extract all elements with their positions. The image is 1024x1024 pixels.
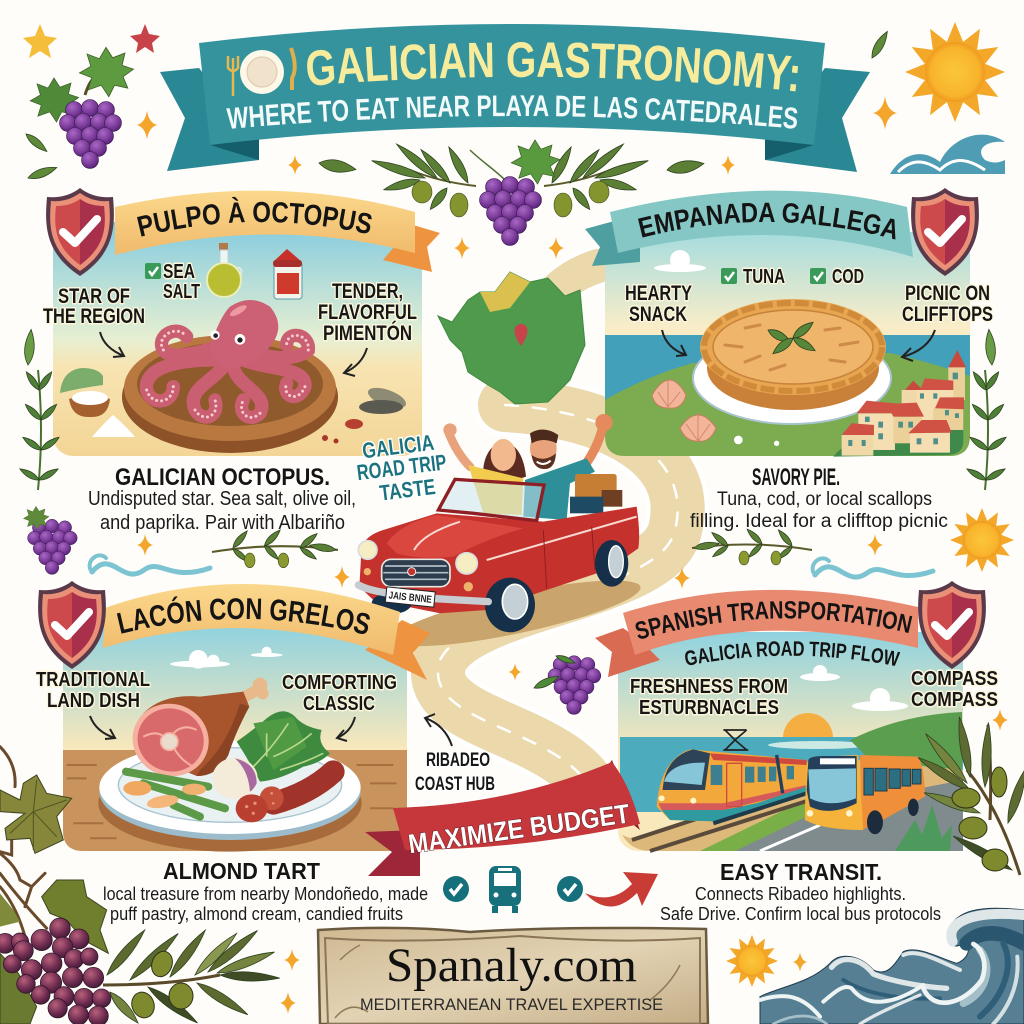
decor: grapes near road <box>509 653 601 714</box>
icon: train <box>657 730 807 823</box>
label: galicia road trip taste: TASTE <box>378 474 437 506</box>
heading: road trip flow: GALICIA ROAD TRIP FLOW <box>685 641 900 666</box>
ribbon: pulpo <box>115 191 440 272</box>
label: comforting classic: CLASSIC <box>303 693 375 715</box>
plate <box>98 741 362 852</box>
label: ribadeo coast hub: COAST HUB <box>415 774 495 795</box>
icon: paprika jar <box>273 249 302 299</box>
text block: easy transit: Connects Ribadeo highlights. <box>695 884 906 904</box>
label: freshness: ESTURBNACLES <box>639 697 779 719</box>
text block: almond tart: puff pastry, almond cream, candied fruits <box>110 904 403 924</box>
label: hearty snack: SNACK <box>629 303 687 326</box>
headlights <box>358 541 377 559</box>
brand name: Spanaly.com <box>386 939 637 992</box>
ribbon title: lacon: LACÓN CON GRELOS <box>116 596 370 634</box>
shield badge: empanada <box>911 188 979 276</box>
panel scene: cloud <box>654 250 706 272</box>
decor: side laurels <box>18 329 1008 490</box>
arrow: star label to plate <box>100 332 124 357</box>
wheels <box>372 593 412 614</box>
ribbon: lacon <box>103 584 430 680</box>
panel scene: rails and road <box>622 760 963 851</box>
subtitle text: WHERE TO EAT NEAR PLAYA DE LAS CATEDRALES <box>226 95 798 129</box>
label: compass: COMPASS <box>911 689 998 711</box>
arrow: to ribadeo hub <box>425 714 452 746</box>
ribbon title: maximize budget: MAXIMIZE BUDGET <box>406 798 632 859</box>
text block: almond tart <box>103 858 428 924</box>
illustration: red convertible with couple <box>358 414 645 659</box>
icon: plate with fork and knife <box>228 48 295 96</box>
label: hearty snack: HEARTY <box>625 282 692 305</box>
decor: right sprig, swirl and sun <box>674 508 1014 589</box>
luggage <box>570 474 622 513</box>
text block: galician octopus: Undisputed star. Sea salt, olive oil, <box>88 488 356 510</box>
car body <box>359 507 639 613</box>
ribbon title: empanada: EMPANADA GALLEGA <box>638 202 896 240</box>
text block: galician octopus <box>88 464 356 534</box>
turnip <box>212 758 258 799</box>
label: picnic on clifftops: CLIFFTOPS <box>902 303 993 326</box>
decor: bottom left vine and grapes <box>0 747 111 1024</box>
plaque: spanaly.com <box>318 928 708 1024</box>
text block: almond tart: ALMOND TART <box>163 858 320 884</box>
shield badge: pulpo <box>46 188 114 276</box>
ribbon title: transportation: SPANISH TRANSPORTATION <box>636 601 912 639</box>
licence plate: JAIS BNNE <box>388 590 432 606</box>
text block: easy transit: EASY TRANSIT. <box>720 859 882 885</box>
tagline: MEDITERRANEAN TRAVEL EXPERTISE <box>360 995 663 1014</box>
label: traditional land dish: LAND DISH <box>47 690 140 712</box>
label: star of the region: STAR OF <box>58 285 130 308</box>
icon: sea salt check <box>145 263 161 279</box>
icon: wooden plate <box>122 335 338 453</box>
chorizo <box>236 772 333 822</box>
panel scene: wooden table <box>63 750 407 851</box>
label: tender flavorful pimenton: FLAVORFUL <box>318 301 417 324</box>
icon: cod check <box>810 268 826 284</box>
arrow: pimenton label to plate <box>344 348 367 376</box>
clouds <box>170 647 283 669</box>
text block: savory pie: filling. Ideal for a clifftop picnic <box>690 511 948 532</box>
lacon dish illustration <box>67 647 397 852</box>
label: star of the region: THE REGION <box>43 305 145 328</box>
text block: galician octopus: and paprika. Pair with Albariño <box>100 512 345 534</box>
text block: savory pie <box>690 464 948 532</box>
label: sea: SEA <box>163 261 195 283</box>
panel scene: green hill <box>605 353 970 456</box>
asparagus with almonds <box>123 772 225 817</box>
ribbon: empanada <box>585 191 913 266</box>
shield badge: lacon <box>38 581 106 669</box>
label: freshness: FRESHNESS FROM <box>630 676 788 698</box>
icon: tuna check <box>721 268 737 284</box>
grille <box>382 559 450 587</box>
ribbon: maximize budget <box>365 760 640 876</box>
decor: right olive branch <box>916 709 1024 875</box>
windshield <box>438 479 544 521</box>
panel scene: bushes <box>60 368 103 393</box>
licence plate <box>385 587 435 607</box>
icon: scallop shells <box>652 380 716 441</box>
icon: galicia map with pin <box>438 272 585 404</box>
label: cod: COD <box>832 266 864 288</box>
text block: easy transit: Safe Drive. Confirm local bus protocols <box>660 904 941 924</box>
decor: bottom olive branch <box>103 927 300 1024</box>
panel scene: clouds <box>800 665 908 711</box>
text block: easy transit <box>660 859 941 924</box>
decor: left grapes and swirl <box>23 506 350 588</box>
panel scene: agave plant <box>895 805 952 851</box>
decor: bottom sun <box>726 935 807 987</box>
icon: olive oil bottle <box>207 243 241 297</box>
panel scene: sun and sea <box>620 713 963 812</box>
icon: clam shells <box>322 384 409 444</box>
label: tender flavorful pimenton: TENDER, <box>332 280 403 303</box>
title text: GALICIAN GASTRONOMY: <box>307 42 798 92</box>
text block: galician octopus: GALICIAN OCTOPUS. <box>115 464 330 491</box>
label: traditional land dish: TRADITIONAL <box>36 669 150 691</box>
arrow: comforting label <box>337 717 355 741</box>
arrow: traditional label <box>90 716 115 739</box>
decor: bottom right wave <box>760 908 1024 1024</box>
label: compass: COMPASS <box>911 668 998 690</box>
text block: almond tart: local treasure from nearby Mondoñedo, made <box>103 884 428 904</box>
label: tender flavorful pimenton: PIMENTÓN <box>323 321 412 345</box>
icon: bus <box>805 755 925 834</box>
decor: top left stars and grapes <box>23 24 160 182</box>
panel: lacon con grelos <box>35 584 430 852</box>
ham <box>122 678 269 787</box>
label: tuna: TUNA <box>743 266 785 288</box>
icon: sea salt bowl <box>69 391 135 437</box>
text block: savory pie: Tuna, cod, or local scallops <box>717 489 932 510</box>
label: salt: SALT <box>163 281 200 303</box>
label: ribadeo coast hub: RIBADEO <box>426 750 490 771</box>
icon: octopus <box>146 300 308 417</box>
title banner <box>160 24 870 172</box>
shield badge: transportation <box>918 581 986 669</box>
panel: spanish transportation <box>595 590 999 853</box>
label: picnic on clifftops: PICNIC ON <box>905 282 990 305</box>
table lines <box>67 765 397 838</box>
bumper <box>358 585 488 602</box>
label: galicia road trip taste: ROAD TRIP <box>355 449 448 485</box>
icon: hillside village <box>734 350 966 457</box>
ribbon: transportation <box>595 590 918 677</box>
panel scene: sea <box>605 335 970 400</box>
ribbon title: pulpo: PULPO À OCTOPUS <box>137 196 372 236</box>
couple <box>443 414 613 520</box>
label: galicia road trip taste: GALICIA <box>361 430 435 463</box>
text block: savory pie: SAVORY PIE. <box>752 464 840 491</box>
road winding through the centre <box>438 266 678 790</box>
panel scene: green headland <box>850 712 962 800</box>
arrow: picnic to pie <box>902 330 935 361</box>
greens <box>237 711 330 782</box>
panel: empanada gallega <box>585 190 994 457</box>
decor: centre olive branch with grapes <box>288 140 735 259</box>
label: comforting classic: COMFORTING <box>282 672 397 694</box>
decor: top right sun and wave <box>868 22 1005 174</box>
arrow: hearty snack to pie <box>662 330 686 356</box>
panel: pulpo a octopus <box>42 190 440 456</box>
icons: bus flow with checks and arrow <box>443 866 658 913</box>
icon: empanada pie <box>693 299 891 424</box>
